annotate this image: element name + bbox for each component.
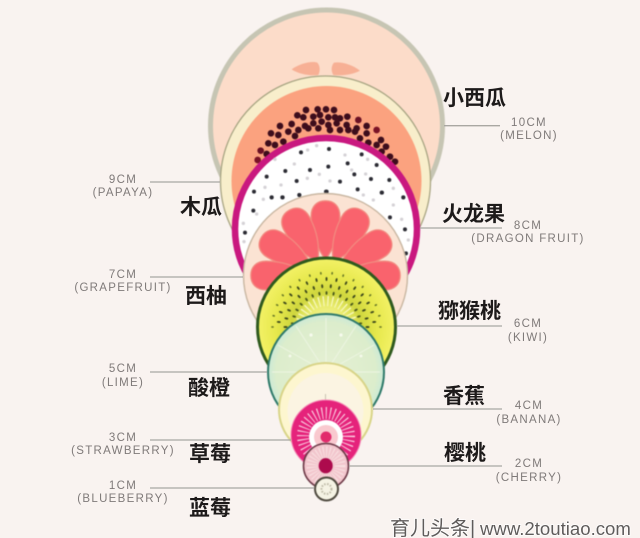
label: grapefruit: 7CM bbox=[109, 269, 137, 281]
cherry bbox=[304, 444, 348, 488]
label: kiwi: 猕猴桃 bbox=[438, 300, 501, 323]
label: kiwi: (KIWI) bbox=[508, 332, 548, 344]
label: lime: (LIME) bbox=[102, 377, 144, 389]
kiwi bbox=[258, 258, 396, 396]
label: papaya: 9CM bbox=[109, 174, 137, 186]
blueberry bbox=[315, 478, 338, 500]
label: melon bbox=[443, 87, 558, 142]
label: strawberry: 草莓 bbox=[189, 443, 231, 466]
papaya bbox=[220, 76, 430, 286]
label: blueberry bbox=[77, 480, 314, 520]
label: papaya: (PAPAYA) bbox=[93, 187, 153, 199]
label: kiwi: 6CM bbox=[514, 318, 542, 330]
label: cherry: 2CM bbox=[515, 458, 543, 470]
dragon fruit bbox=[235, 138, 417, 320]
fruit stack bbox=[210, 10, 442, 500]
watermark bbox=[390, 517, 631, 538]
label: grapefruit: 西柚 bbox=[185, 285, 227, 308]
label: blueberry: 1CM bbox=[109, 480, 137, 492]
label: strawberry bbox=[71, 432, 291, 466]
label: grapefruit bbox=[74, 269, 243, 308]
label: papaya bbox=[93, 174, 222, 219]
strawberry bbox=[291, 400, 361, 470]
label: melon: 10CM bbox=[511, 117, 547, 129]
label: blueberry: 蓝莓 bbox=[189, 497, 231, 520]
label: dragon fruit: 火龙果 bbox=[442, 203, 505, 226]
label: banana: 4CM bbox=[515, 400, 543, 412]
label: cherry bbox=[349, 441, 562, 484]
label: papaya: 木瓜 bbox=[180, 196, 222, 219]
grapefruit bbox=[244, 194, 408, 358]
label: grapefruit: (GRAPEFRUIT) bbox=[74, 282, 172, 294]
melon bbox=[210, 10, 442, 242]
label: cherry: 樱桃 bbox=[444, 441, 486, 465]
label: lime: 酸橙 bbox=[188, 377, 230, 400]
label: lime: 5CM bbox=[109, 363, 137, 375]
label: dragon fruit: 8CM bbox=[514, 220, 542, 232]
lime bbox=[268, 314, 384, 430]
label: banana: 香蕉 bbox=[443, 385, 485, 408]
label: banana bbox=[373, 385, 562, 426]
label: lime bbox=[102, 363, 267, 400]
label: melon: 小西瓜 bbox=[443, 87, 506, 110]
banana bbox=[279, 363, 372, 456]
label: dragon fruit: (DRAGON FRUIT) bbox=[471, 233, 585, 245]
label: strawberry: 3CM bbox=[109, 432, 137, 444]
label: dragon fruit bbox=[420, 203, 585, 245]
label: kiwi bbox=[397, 300, 548, 344]
label: cherry: (CHERRY) bbox=[496, 472, 562, 484]
label: blueberry: (BLUEBERRY) bbox=[77, 493, 169, 505]
label: strawberry: (STRAWBERRY) bbox=[71, 445, 175, 457]
label: melon: (MELON) bbox=[500, 130, 558, 142]
label: banana: (BANANA) bbox=[496, 414, 562, 426]
